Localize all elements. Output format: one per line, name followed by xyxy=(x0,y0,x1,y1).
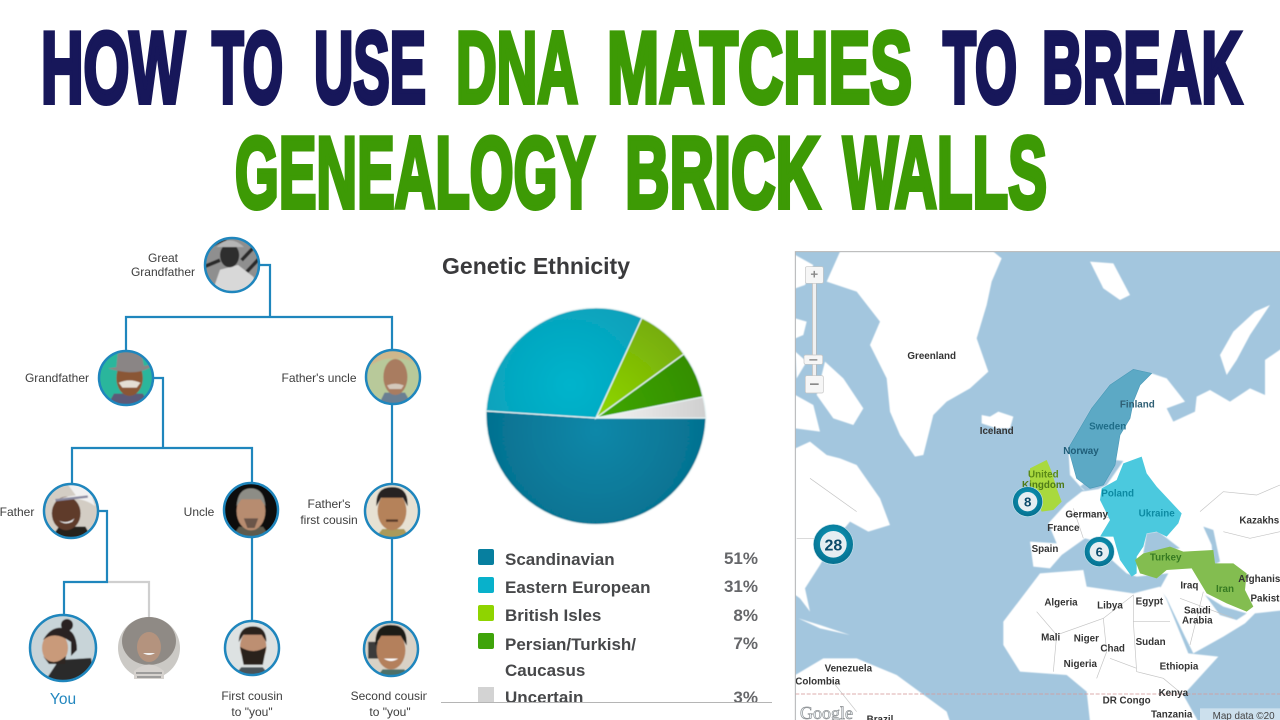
scandinavia region xyxy=(1068,369,1152,488)
map labels: Germany xyxy=(1065,510,1108,521)
label: second cousin: Second cousin xyxy=(351,689,429,703)
title navy words: USE xyxy=(314,12,426,124)
title green words xyxy=(456,12,912,124)
map attribution background xyxy=(1200,708,1280,720)
marker: 28 xyxy=(813,524,853,564)
legend: british isles: British Isles xyxy=(505,606,601,625)
persian turkish caucasus region xyxy=(1135,547,1253,612)
map labels: Arabia xyxy=(1182,616,1213,627)
map labels: Iran xyxy=(1216,584,1234,595)
map labels: Iceland xyxy=(980,426,1014,437)
map labels: Egypt xyxy=(1136,596,1164,607)
country borders xyxy=(797,478,1280,712)
map labels: Kazakhs xyxy=(1239,515,1280,526)
map labels: Algeria xyxy=(1044,597,1078,608)
zoom control xyxy=(804,267,823,393)
map labels: Mali xyxy=(1041,632,1060,643)
title navy words: HOW xyxy=(41,12,185,124)
legend: british isles: 8% xyxy=(733,606,758,625)
equator line xyxy=(796,694,1280,695)
pie chart xyxy=(486,308,706,525)
title navy words: TO xyxy=(212,12,283,124)
legend: british isles xyxy=(478,605,758,625)
label: uncle: Uncle xyxy=(184,505,215,519)
map labels: Sudan xyxy=(1136,637,1166,648)
legend: eastern european xyxy=(478,577,758,597)
map labels: Ukraine xyxy=(1139,509,1175,520)
inland seas xyxy=(1080,460,1247,620)
legend: scandinavian: 51% xyxy=(724,549,758,568)
label: father's first cousin: first cousin xyxy=(300,513,358,527)
zoom control: + xyxy=(810,267,818,282)
label: father: Father xyxy=(0,505,34,519)
map labels: Venezuela xyxy=(825,663,873,674)
label: first cousin: to "you" xyxy=(231,705,273,719)
legend: eastern european: 31% xyxy=(724,577,758,596)
british isles region xyxy=(1030,460,1062,512)
marker: 8: 8 xyxy=(1024,495,1031,510)
map labels: United xyxy=(1028,470,1059,481)
legend: uncertain: Uncertain xyxy=(505,688,583,707)
title navy words xyxy=(41,12,426,124)
legend: scandinavian xyxy=(478,549,758,569)
legend: scandinavian: Scandinavian xyxy=(505,550,615,569)
title second line: BRICK xyxy=(625,118,820,230)
portrait: father's uncle xyxy=(364,348,422,406)
portrait: father's first cousin xyxy=(365,484,419,543)
legend: persian/turkish/caucasus: Persian/Turkish/ xyxy=(505,635,636,654)
marker: 6 xyxy=(1084,537,1114,567)
label: second cousin: to "you" xyxy=(369,705,411,719)
label: father's uncle: Father's uncle xyxy=(282,371,357,385)
marker: 6: 6 xyxy=(1096,545,1103,560)
eastern europe region xyxy=(1100,457,1182,577)
map labels: Kenya xyxy=(1159,688,1189,699)
label: great grandfather: Grandfather xyxy=(131,265,195,279)
map labels: Chad xyxy=(1100,644,1125,655)
map labels: Ethiopia xyxy=(1160,661,1199,672)
title navy words 2 xyxy=(943,12,1242,124)
map labels: Poland xyxy=(1101,489,1134,500)
panel: world map xyxy=(795,252,1280,720)
map labels: Saudi xyxy=(1184,606,1211,617)
map labels: Spain xyxy=(1032,544,1058,555)
map labels: Libya xyxy=(1097,600,1123,611)
label: grandfather: Grandfather xyxy=(25,371,89,385)
legend xyxy=(478,549,758,707)
tree labels xyxy=(0,251,429,719)
map labels: Pakist xyxy=(1251,594,1280,605)
legend: persian/turkish/caucasus xyxy=(478,633,758,680)
label: great grandfather: Great xyxy=(148,251,178,265)
map labels: Finland xyxy=(1120,399,1155,410)
ocean xyxy=(795,252,1280,720)
legend: uncertain: 3% xyxy=(733,688,758,707)
legend: uncertain xyxy=(478,687,758,707)
map labels xyxy=(795,351,1280,720)
portrait: second cousin xyxy=(364,622,418,681)
family tree panel xyxy=(0,238,429,719)
title green words: MATCHES xyxy=(607,12,912,124)
map labels: Nigeria xyxy=(1064,659,1098,670)
map labels: Sweden xyxy=(1089,421,1126,432)
panel: genetic ethnicity xyxy=(441,253,772,707)
label: you: You xyxy=(50,691,76,708)
portrait: sibling faded xyxy=(118,617,180,679)
title second line: GENEALOGY xyxy=(235,118,595,230)
marker: 28: 28 xyxy=(824,537,842,554)
legend: eastern european: Eastern European xyxy=(505,578,650,597)
title navy words 2: TO xyxy=(943,12,1017,124)
legend: persian/turkish/caucasus: Caucasus xyxy=(505,661,585,680)
portrait: uncle xyxy=(224,483,278,542)
heading: genetic ethnicity: Genetic Ethnicity xyxy=(442,253,630,279)
title xyxy=(41,12,1242,230)
portrait: you xyxy=(30,615,96,681)
map labels: Norway xyxy=(1063,446,1099,457)
legend: persian/turkish/caucasus: 7% xyxy=(733,634,758,653)
label: first cousin: First cousin xyxy=(221,689,283,703)
map labels: Turkey xyxy=(1150,553,1182,564)
map labels: Niger xyxy=(1074,634,1099,645)
title second line: WALLS xyxy=(843,118,1047,230)
land masses xyxy=(795,252,1280,720)
map labels: France xyxy=(1047,523,1080,534)
portrait: grandfather xyxy=(99,351,155,410)
map labels: Colombia xyxy=(795,677,841,688)
portrait: great grandfather xyxy=(204,236,260,294)
label: father's first cousin: Father's xyxy=(308,497,350,511)
marker: 8 xyxy=(1013,487,1043,517)
tree connector lines xyxy=(64,265,392,623)
portrait: first cousin xyxy=(225,621,279,680)
map labels: Iraq xyxy=(1180,581,1198,592)
map frame xyxy=(795,252,1280,720)
map labels: Afghanis xyxy=(1238,574,1280,585)
portrait: father xyxy=(44,481,98,543)
map labels: DR Congo xyxy=(1103,696,1151,707)
title green words: DNA xyxy=(456,12,578,124)
map labels: Kingdom xyxy=(1022,480,1065,491)
map labels: Greenland xyxy=(907,351,956,362)
